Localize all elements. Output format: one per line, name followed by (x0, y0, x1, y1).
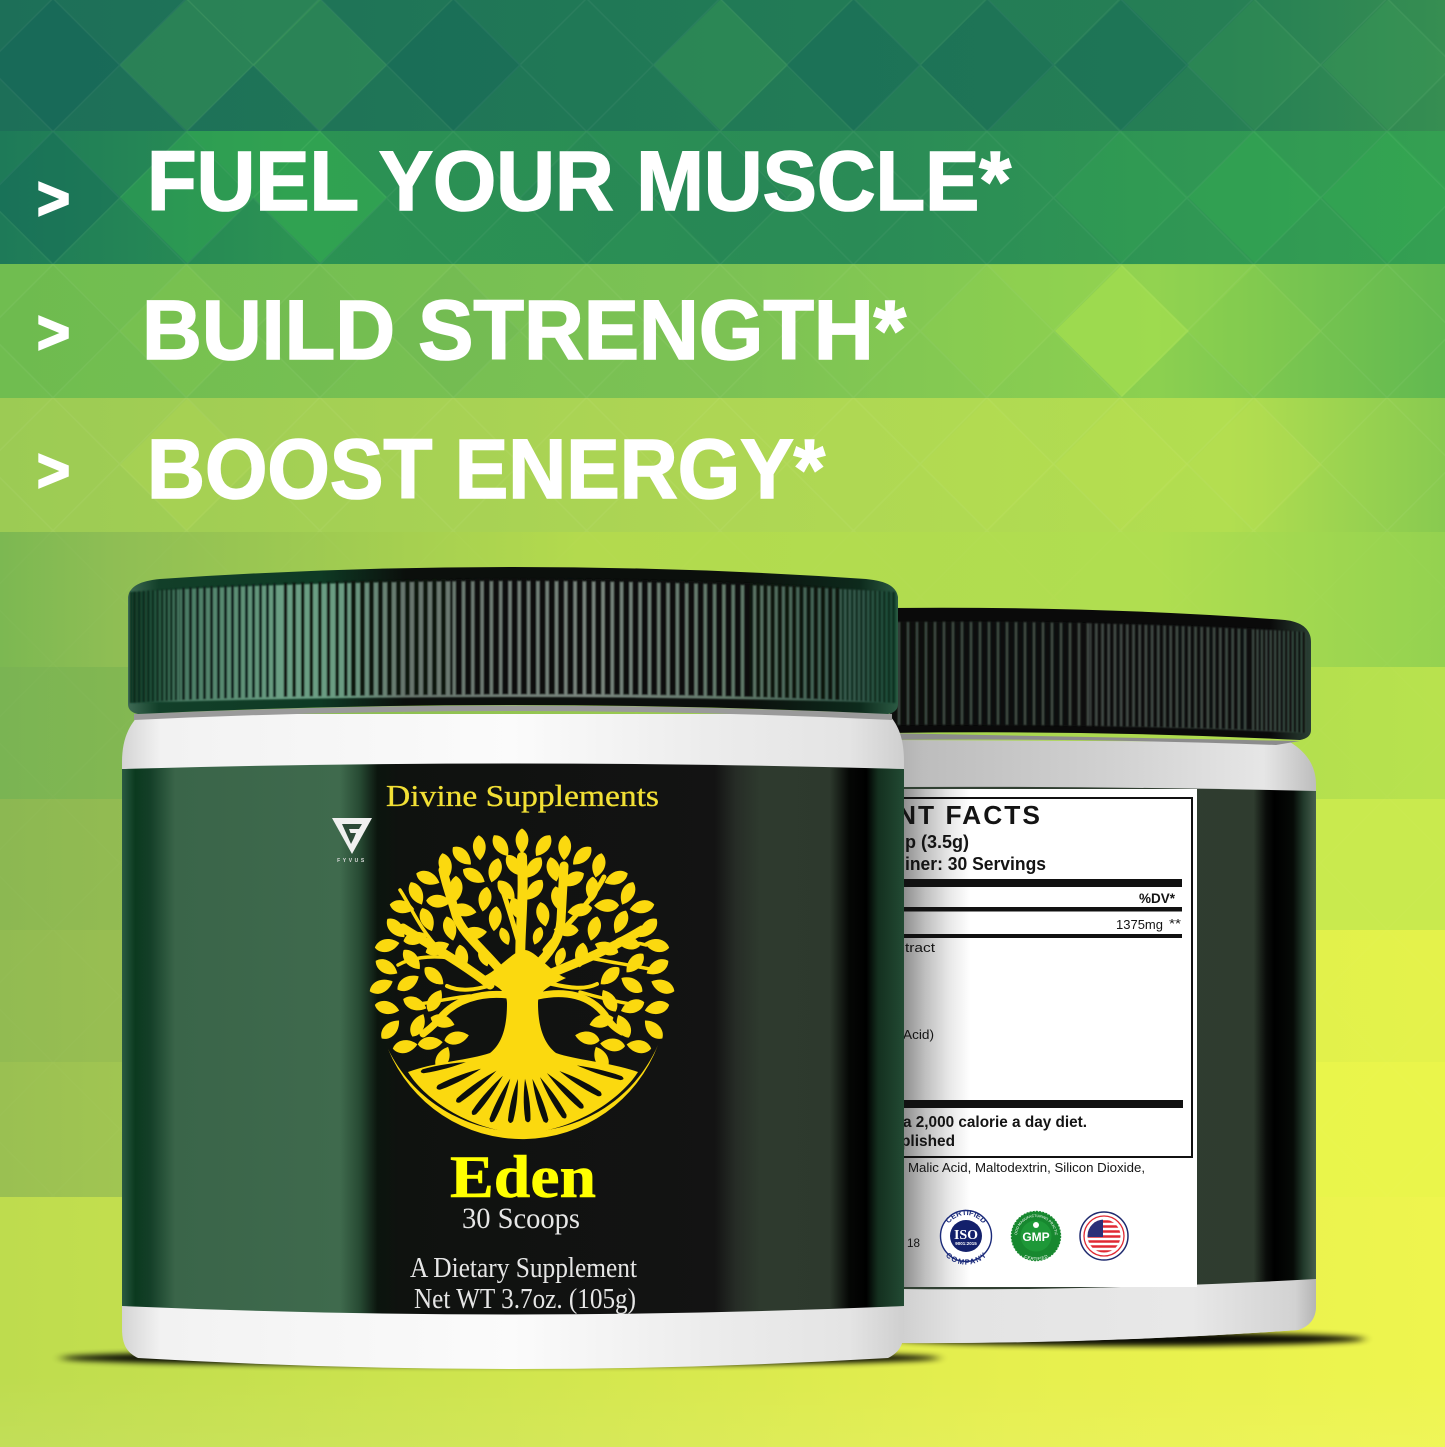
front jar shadow (60, 1350, 940, 1366)
back jar lower band (900, 1278, 1316, 1343)
bullet: build strength: BUILD STRENGTH* (142, 283, 906, 377)
badge: GMP: GOOD MANUFACTURING PRACTICE (1014, 1214, 1058, 1236)
front jar lid (128, 567, 898, 714)
dietary supplement line: A Dietary Supplement (410, 1253, 637, 1284)
serving size: p (3.5g) (905, 832, 969, 852)
neck shadow (134, 706, 892, 720)
ingredient fragments: tract (905, 940, 935, 955)
bullet: boost energy: BOOST ENERGY* (147, 422, 825, 516)
back jar (890, 608, 1370, 1351)
badge: GMP: GMP (1022, 1230, 1050, 1244)
badge: ISO: ISO (954, 1228, 978, 1243)
front jar (60, 567, 940, 1369)
scoop count: 30 Scoops (462, 1202, 580, 1235)
supplement facts panel: 18 (907, 1238, 920, 1250)
supplement facts panel: Acid) (903, 1027, 934, 1042)
supplement facts panel: iner: 30 Servings (905, 854, 1046, 874)
other ingredients: Malic Acid, Maltodextrin, Silicon Dioxide, (908, 1161, 1145, 1175)
logo: FYVUS: FYVUS (337, 858, 367, 864)
back jar label (900, 787, 1316, 1289)
brand name: Divine Supplements (386, 778, 659, 813)
bullet: fuel your muscle: FUEL YOUR MUSCLE* (147, 134, 1011, 228)
supplement facts panel (880, 789, 1197, 1287)
canopy leaves (367, 828, 677, 1072)
headline bullet list (37, 134, 1011, 516)
tree of life emblem (367, 828, 677, 1139)
back jar lid (890, 608, 1311, 740)
badge: GMP (1010, 1210, 1062, 1262)
branches (398, 857, 655, 1034)
trunk and roots (408, 950, 638, 1134)
crescent ground arc (388, 1045, 658, 1139)
badge: ISO (940, 1210, 992, 1265)
badge: GMP: CERTIFIED (1024, 1255, 1048, 1260)
bullet: fuel your muscle: > (37, 165, 70, 232)
back jar shadow (895, 1332, 1365, 1346)
product name: Eden (450, 1144, 596, 1210)
badge: ISO: CERTIFIED (946, 1210, 986, 1222)
back jar body (880, 740, 1316, 1343)
bullet: build strength: > (37, 299, 70, 366)
amount row: 1375mg (1116, 917, 1163, 932)
supplement facts panel: plished (901, 1133, 955, 1150)
bullet: boost energy: > (37, 437, 70, 504)
front label (122, 764, 904, 1314)
footnote: a 2,000 calorie a day diet. (903, 1114, 1087, 1131)
front jar body (122, 714, 904, 1369)
net weight line: Net WT 3.7oz. (105g) (414, 1284, 636, 1315)
badge: ISO: COMPANY (946, 1252, 986, 1265)
supplement facts panel: ** (1169, 916, 1181, 931)
logo: FYVUS (332, 818, 372, 864)
panel heading: NT FACTS (897, 800, 1042, 830)
daily value column: %DV* (1139, 890, 1176, 906)
root channels (420, 1060, 624, 1124)
badge: ISO: 9001:2015 (955, 1241, 977, 1246)
badge: USA flag (1080, 1212, 1128, 1260)
